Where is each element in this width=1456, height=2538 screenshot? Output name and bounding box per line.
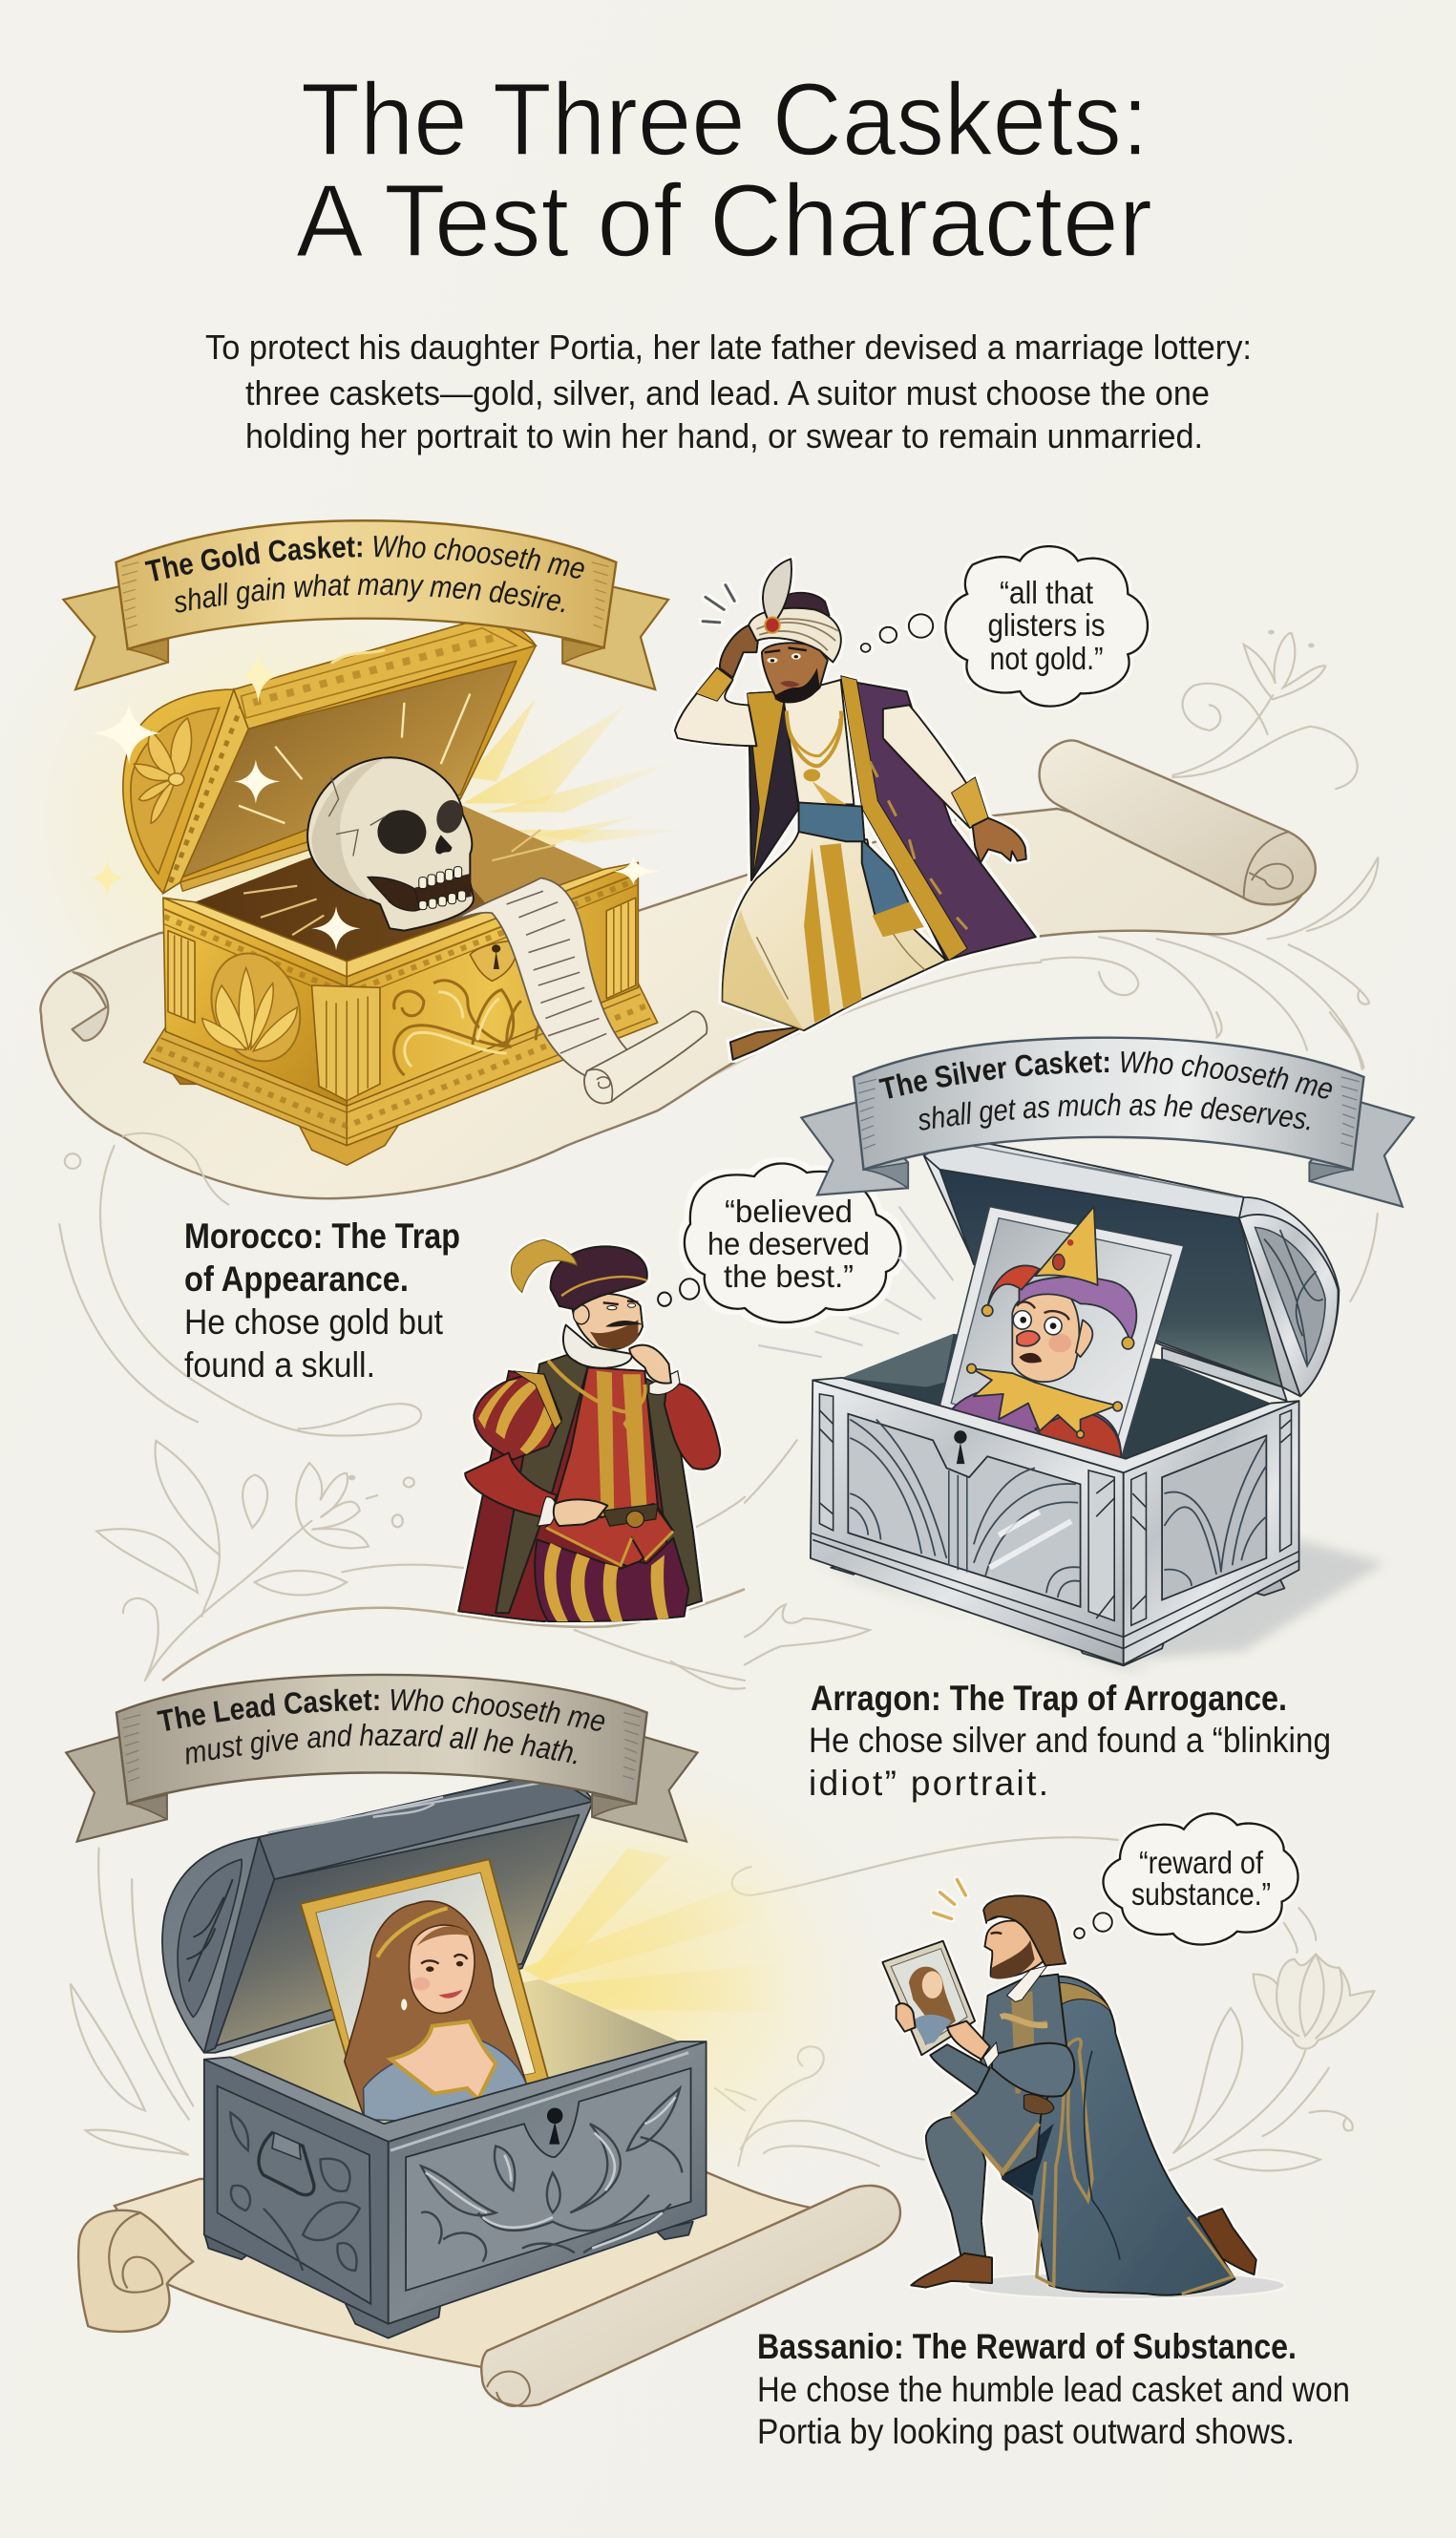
torso <box>783 680 854 804</box>
casket: lead <box>162 1772 776 2338</box>
character: Morocco <box>675 559 1036 1060</box>
head <box>762 643 828 702</box>
thought bubble: all that glisters: glisters is <box>987 607 1106 643</box>
feather <box>763 559 791 624</box>
parchment scroll: lead casket <box>78 2172 900 2406</box>
portrait in hands <box>882 1941 975 2055</box>
caption: Arragon: idiot” portrait. <box>809 1764 1048 1803</box>
banner: gold casket <box>61 519 670 691</box>
intro paragraph <box>205 328 1252 455</box>
sash <box>799 802 865 841</box>
box faces <box>144 862 658 1165</box>
carved foliage <box>230 2088 682 2271</box>
left hand <box>720 625 759 678</box>
fan ornament on lid end <box>131 708 220 874</box>
intro paragraph: three caskets—gold, silver, and lead. A suitor must choose the one <box>245 373 1210 412</box>
front panel <box>848 1414 1081 1607</box>
left arm <box>675 668 756 746</box>
caption: Morocco <box>184 1216 460 1385</box>
gold clasp <box>1001 2016 1047 2025</box>
hand on chin <box>629 1345 671 1384</box>
caption: Morocco: Morocco: The Trap <box>184 1216 460 1256</box>
intro paragraph: To protect his daughter Portia, her late father devised a marriage lottery: <box>205 328 1252 367</box>
front panel <box>406 2068 691 2291</box>
motion lines <box>758 1207 954 1357</box>
caption: Bassanio: Bassanio: The Reward of Substance. <box>757 2327 1297 2366</box>
fall of sash <box>862 839 912 916</box>
keyhole plate <box>470 941 517 981</box>
shadow <box>1130 1540 1384 1660</box>
doublet <box>548 1367 673 1569</box>
caption: Morocco: found a skull. <box>184 1345 375 1385</box>
thought bubble: reward of substance: substance.” <box>1131 1876 1271 1912</box>
title <box>296 61 1152 278</box>
back foot <box>1199 2209 1256 2274</box>
banner: lead casket: must give and hazard all he hath. <box>186 1724 577 1765</box>
banner: silver casket: The Silver Casket: Who chooseth me <box>878 1050 1333 1098</box>
head <box>573 1294 643 1349</box>
box interior <box>195 806 604 962</box>
caption: Bassanio: Portia by looking past outward shows. <box>757 2412 1295 2451</box>
character: Arragon <box>458 1239 720 1621</box>
decorative flourishes: Morocco panel swirls and flower <box>59 1146 745 1681</box>
side pilasters <box>819 1394 1291 1625</box>
banner: lead casket <box>65 1673 699 1843</box>
sparkles <box>90 650 660 950</box>
palmette ornament <box>199 944 313 1070</box>
thought bubble: believed he deserved <box>658 1163 900 1322</box>
Portia <box>345 1901 526 2122</box>
feather <box>511 1239 577 1293</box>
striped trunk hose <box>535 1538 688 1621</box>
intro paragraph: holding her portrait to win her hand, or swear to remain unmarried. <box>245 416 1203 455</box>
thought bubble: all that glisters <box>861 546 1148 707</box>
thought dots <box>658 1279 699 1306</box>
box front and side <box>811 1378 1299 1665</box>
box faces <box>204 2041 707 2338</box>
thought bubble: all that glisters: not gold.” <box>989 641 1104 676</box>
thought bubble: believed he deserved: he deserved <box>707 1226 870 1261</box>
decorative flourishes: Bassanio flower and swirls <box>726 1837 1374 2177</box>
caption: Morocco: of Appearance. <box>184 1259 409 1299</box>
belt <box>603 1504 658 1526</box>
art deco arcs <box>850 1420 1266 1597</box>
banner: gold casket: shall gain what many men desire. <box>176 574 564 613</box>
glow: lead casket radiance <box>353 1747 888 2225</box>
jester <box>951 1207 1136 1459</box>
hat <box>550 1246 647 1309</box>
scroll ornament <box>394 981 556 1075</box>
lid <box>162 1772 593 2053</box>
belt pouch <box>1023 2095 1054 2114</box>
right hand <box>973 818 1026 863</box>
left curl of scroll <box>73 972 108 1041</box>
decorative flourishes: lower band leaves <box>745 1012 1378 1664</box>
front leg and shoe <box>926 2117 985 2262</box>
left curl of lead scroll <box>78 2210 193 2332</box>
lower arm left <box>465 1452 557 1517</box>
caption: Arragon: He chose silver and found a “blinking <box>809 1721 1331 1760</box>
caption: Arragon: Arragon: The Trap of Arrogance. <box>811 1679 1287 1718</box>
thought bubble: reward of substance: “reward of <box>1139 1845 1264 1880</box>
casket: gold <box>90 617 707 1165</box>
rays <box>522 1849 776 2013</box>
sleeve puff <box>474 1374 561 1460</box>
interior <box>230 1979 680 2124</box>
character: Bassanio <box>882 1879 1284 2298</box>
hand on hip <box>554 1499 607 1526</box>
turban <box>780 593 830 616</box>
columns <box>168 931 195 1023</box>
rolled end of lead scroll <box>481 2186 900 2406</box>
banner: silver casket <box>800 1037 1416 1209</box>
tunic <box>952 1974 1066 2174</box>
head <box>984 1920 1044 1978</box>
keyhole <box>547 2107 562 2145</box>
paper scroll from casket <box>455 878 707 1104</box>
banner: gold casket: The Gold Casket: Who chooseth me <box>145 535 584 582</box>
right arm <box>665 1384 720 1470</box>
decorative flourishes: lead casket left leaves <box>71 1661 745 2155</box>
shoe <box>730 1026 804 1060</box>
caption: Arragon <box>809 1679 1331 1803</box>
parchment scroll: gold casket <box>40 740 1316 1205</box>
thought bubble: believed he deserved: “believed <box>725 1194 853 1229</box>
banner: silver casket: shall get as much as he deserves. <box>918 1092 1310 1131</box>
portrait <box>301 1859 548 2122</box>
glow: gold casket radiance <box>0 525 601 1117</box>
gold lid <box>123 617 536 894</box>
light rays <box>463 698 686 852</box>
thought bubble: reward of substance <box>1074 1813 1298 1945</box>
side panel <box>218 2086 370 2304</box>
shadow <box>968 2273 1284 2298</box>
awe marks <box>934 1879 965 1918</box>
trousers <box>723 832 946 1030</box>
decorative flourishes: top right flower <box>657 630 1378 1108</box>
robe <box>841 680 1036 961</box>
cape <box>1002 1977 1234 2295</box>
ruff <box>563 1324 632 1368</box>
near arm <box>992 2043 1074 2097</box>
caption: Bassanio <box>757 2327 1350 2451</box>
gold chain <box>548 1361 645 1412</box>
inside <box>842 1334 1271 1459</box>
hands <box>947 2021 990 2060</box>
thought bubble: all that glisters: “all that <box>1000 575 1093 610</box>
handle <box>259 2133 314 2195</box>
right arm <box>883 705 988 828</box>
cape <box>458 1371 702 1621</box>
rolled end of scroll <box>1040 740 1316 904</box>
caption: Morocco: He chose gold but <box>184 1302 444 1342</box>
caption: Bassanio: He chose the humble lead casket and won <box>757 2370 1350 2409</box>
portrait frame <box>939 1207 1184 1459</box>
banner: lead casket: The Lead Casket: Who chooseth me <box>157 1688 605 1731</box>
skull <box>307 757 474 931</box>
title: A Test of Character <box>296 162 1152 278</box>
casket: silver <box>758 1137 1384 1669</box>
thought bubble: believed he deserved: the best.” <box>724 1258 854 1294</box>
dark cape <box>749 691 799 880</box>
lid <box>924 1137 1339 1401</box>
worry marks <box>703 585 734 623</box>
title: The Three Caskets: <box>301 61 1149 177</box>
